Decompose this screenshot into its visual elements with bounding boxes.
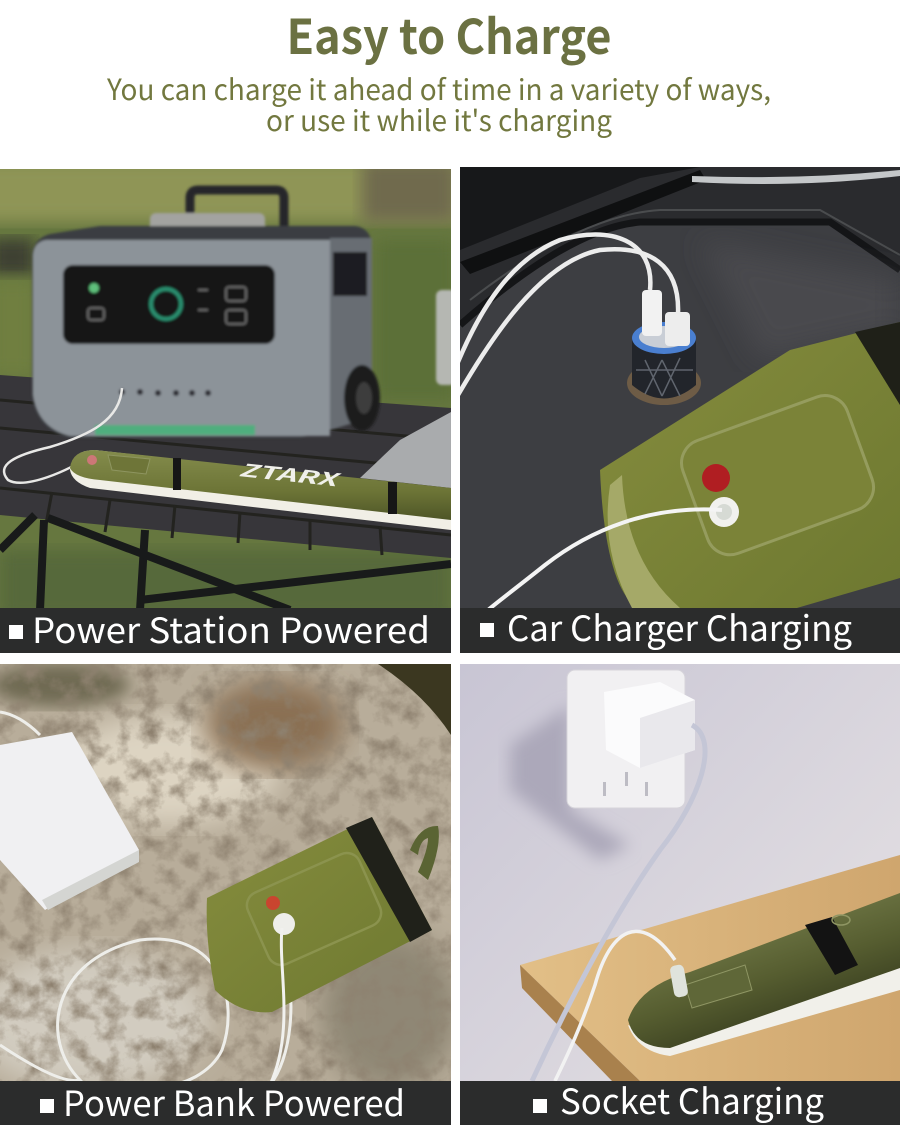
caption: Car Charger Charging: [460, 608, 900, 653]
caption: Car Charger Charging: Car Charger Charging: [507, 601, 852, 652]
title: Easy to Charge: [286, 0, 612, 68]
photo background: wall and shelf: [460, 664, 900, 1125]
icon: white power bank: [0, 732, 139, 910]
caption: Power Station Powered: Power Station Powered: [32, 603, 430, 654]
panel: car charger charging: [458, 167, 900, 653]
caption: Socket Charging: [460, 1081, 900, 1125]
photo background: car dashboard: [460, 167, 900, 653]
icon: car charger: [627, 290, 701, 405]
caption: Socket Charging: Socket Charging: [560, 1074, 824, 1125]
icon: olive water tube: [628, 893, 900, 1056]
subtitle: [106, 67, 771, 140]
charging cable: [4, 388, 122, 483]
photo background: rock: [0, 664, 451, 1081]
panel: power station powered: [0, 160, 470, 654]
charging cable to bag: [488, 509, 722, 610]
subtitle: or use it while it's charging: [266, 98, 612, 140]
charging cable to bag: [270, 928, 284, 1085]
icon: wall socket with plug: [567, 670, 695, 808]
panel: socket charging: [460, 664, 900, 1125]
panel: power bank powered: [0, 663, 460, 1125]
charging cable loop: [0, 712, 291, 1085]
charging cables: [458, 234, 678, 395]
subtitle: You can charge it ahead of time in a variety of ways,: [106, 67, 771, 109]
icon: olive water bag: [207, 817, 439, 1012]
icon: olive water tube: [70, 450, 451, 530]
icon: olive water tube: ZTARX: [237, 456, 344, 493]
laptop on table: [360, 412, 451, 488]
icon: olive water bag: [600, 322, 900, 610]
photo background: grass and table: [0, 169, 451, 608]
charging cables: [532, 725, 705, 1081]
icon: power station: [32, 190, 456, 438]
